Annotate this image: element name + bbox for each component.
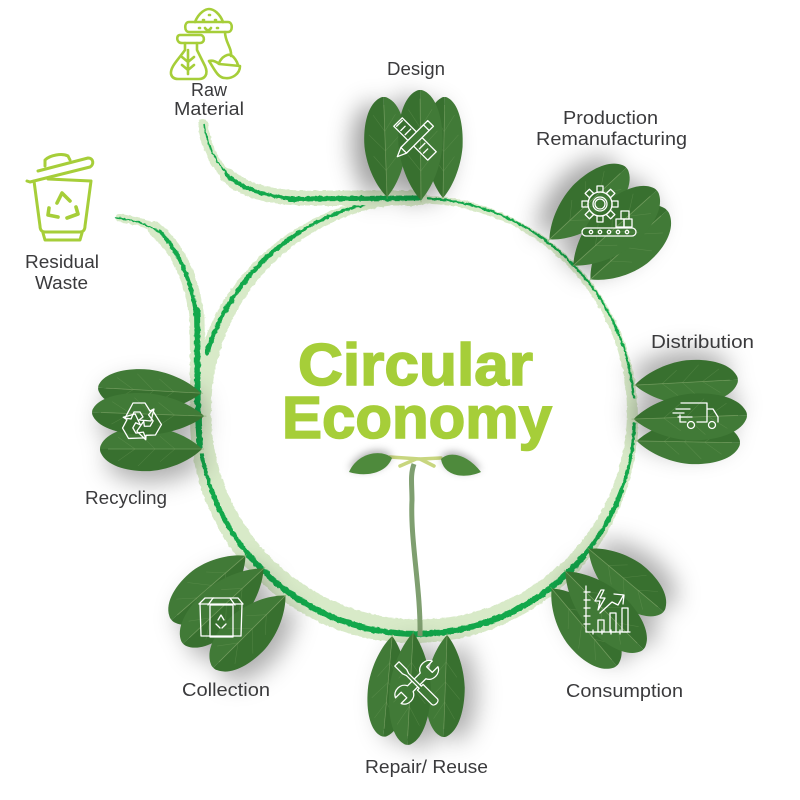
icon: recycling bin	[27, 155, 93, 240]
label: residual: Residual	[25, 252, 99, 272]
label: recycling: Recycling	[85, 488, 167, 508]
leaves: design	[363, 90, 464, 203]
circular ring: pale brush band	[190, 195, 638, 643]
label: consumption: Consumption	[566, 681, 683, 701]
label: repair and reuse: Repair/ Reuse	[365, 757, 488, 777]
title: Economy	[282, 385, 552, 451]
circular ring: green brush line	[201, 198, 634, 634]
title	[282, 332, 552, 451]
seedling at circle centre	[349, 453, 481, 636]
icon: wrench and screwdriver	[392, 657, 442, 707]
leaves: production	[532, 151, 685, 300]
leaves: consumption	[532, 531, 678, 681]
leaves: repair and reuse	[364, 630, 467, 746]
icon: gear and conveyor	[582, 186, 636, 236]
leaves: distribution	[631, 358, 748, 465]
label: collection: Collection	[182, 680, 270, 700]
icon: raw material sack and flask	[171, 9, 240, 79]
icon: waste bins	[199, 598, 243, 637]
label: raw: Raw	[191, 80, 228, 100]
leaves: recycling	[91, 367, 207, 471]
title: Circular	[298, 332, 533, 398]
icon: delivery truck	[673, 403, 718, 428]
label: material: Material	[174, 99, 244, 119]
branch: residual waste stream	[116, 218, 200, 446]
icon: pencil and ruler	[394, 118, 436, 160]
label: production: Production	[563, 108, 658, 128]
label: waste: Waste	[35, 273, 88, 293]
icon: recycling arrows	[118, 403, 165, 445]
icon: chart with rising arrow	[584, 586, 630, 634]
label: distribution: Distribution	[651, 332, 754, 352]
label: design: Design	[387, 59, 445, 79]
label: remanufacturing: Remanufacturing	[536, 129, 687, 149]
branch: raw material stream	[203, 124, 420, 199]
leaves: collection	[156, 537, 303, 684]
